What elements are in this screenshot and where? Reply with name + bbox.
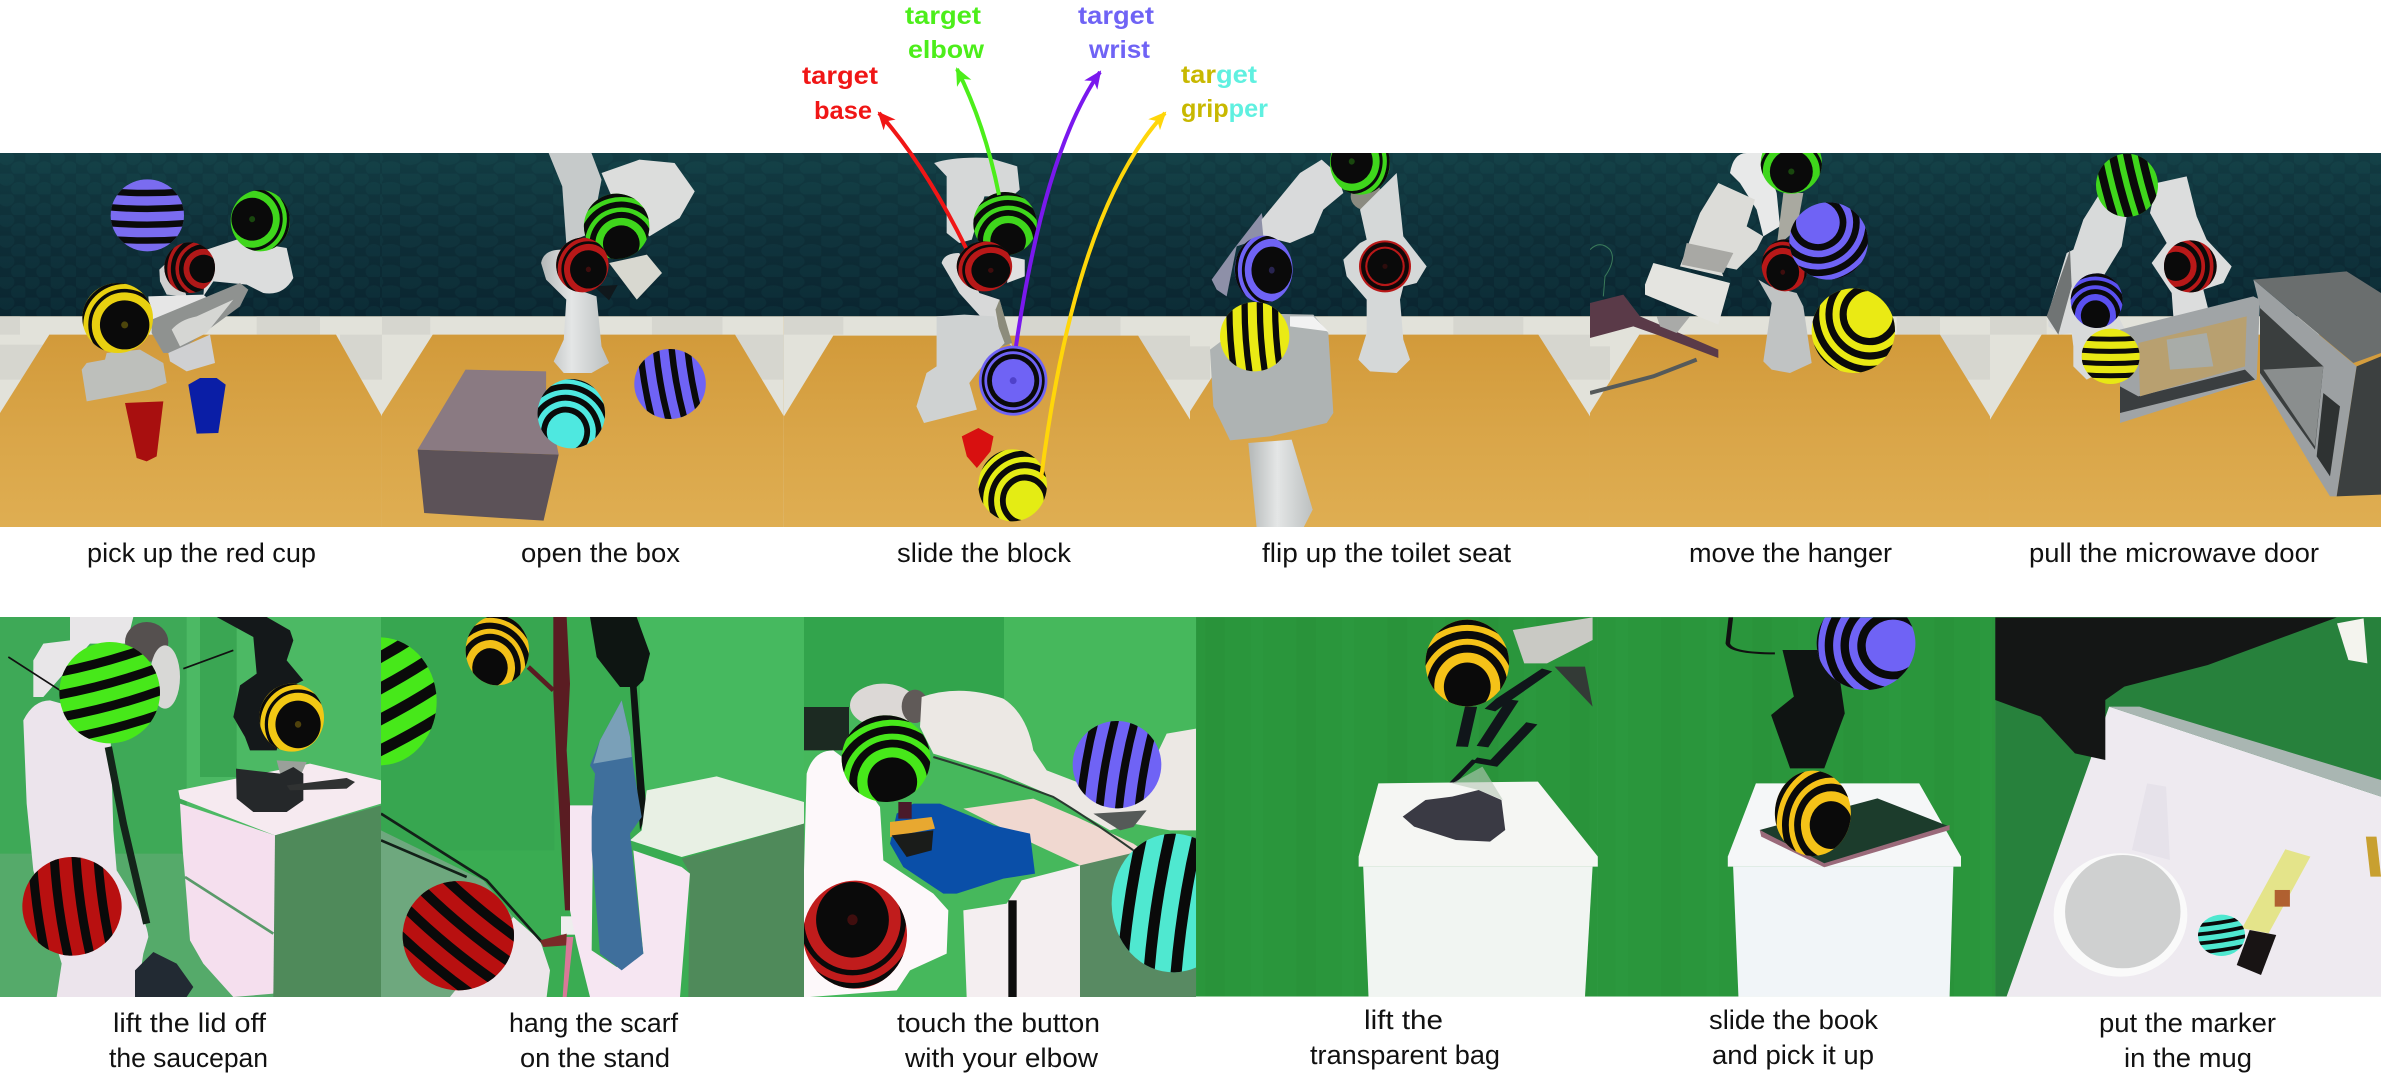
caption: open the box: open the box (521, 538, 681, 568)
cable (933, 757, 1133, 850)
stand (528, 617, 577, 997)
scarf (590, 700, 643, 970)
target wrist ball (1066, 714, 1168, 815)
label: target base: target (802, 62, 879, 90)
target elbow ball (584, 194, 650, 259)
caption: touch the button with your elbow: touch the button (897, 1008, 1100, 1038)
arrow: target gripper (1041, 113, 1165, 479)
label: target wrist: target (1078, 2, 1155, 30)
caption: lift the lid off the saucepan: lift the lid off (113, 1008, 267, 1038)
target elbow ball (1330, 153, 1390, 195)
gripper (590, 617, 650, 830)
target elbow ball (2089, 147, 2165, 224)
target base ball (1359, 240, 1411, 292)
target gripper ball (1220, 302, 1290, 372)
microwave (2253, 271, 2381, 496)
panel: touch the button with your elbow scene (779, 617, 1245, 999)
target gripper ball (538, 379, 606, 448)
label: target elbow (905, 2, 985, 64)
caption: hang the scarf on the stand (509, 1008, 678, 1073)
target base ball (556, 238, 609, 292)
target base ball (380, 859, 537, 1013)
target wrist ball (2053, 270, 2138, 361)
target base ball (956, 241, 1012, 292)
target elbow ball (48, 631, 171, 755)
label: target wrist: wrist (1088, 36, 1151, 64)
caption: pull the microwave door: pull the microwave door (2029, 538, 2319, 568)
panel: pick up the red cup scene (0, 153, 382, 530)
panel: slide the block scene (784, 153, 1190, 527)
pencil (2366, 837, 2381, 877)
robot base (23, 700, 148, 997)
target gripper ball (82, 283, 153, 353)
caption: lift the transparent bag: lift the (1364, 1005, 1443, 1035)
gripper (1771, 650, 1845, 768)
panel: slide the book and pick it up scene (1598, 565, 1995, 997)
panel: hang the scarf on the stand scene (305, 596, 804, 1013)
robot upper arm (33, 617, 133, 697)
arrow: target base (879, 113, 966, 248)
target gripper ball (1404, 620, 1531, 753)
label: target base (802, 62, 879, 125)
bag on floor (135, 952, 193, 997)
gripper (1452, 670, 1547, 783)
panel: open the box scene (382, 153, 784, 530)
gripper overhead (1995, 617, 2337, 760)
target base ball (164, 242, 215, 293)
robot wrist block (1645, 183, 1763, 325)
label: target elbow: target (905, 2, 982, 30)
caption: touch the button with your elbow: with your elbow (904, 1043, 1099, 1073)
panel: lift the transparent bag scene (1196, 617, 1598, 997)
caption: slide the block: slide the block (897, 538, 1071, 568)
arrow: target wrist (1016, 72, 1100, 346)
caption: slide the book and pick it up (1709, 1005, 1878, 1070)
target gripper ball (426, 596, 554, 738)
caption: lift the lid off the saucepan (109, 1008, 268, 1073)
target base ball (16, 851, 128, 962)
toilet seat (1210, 313, 1333, 528)
target base ball (1762, 239, 1808, 292)
target gripper ball (2082, 329, 2140, 384)
gripper (217, 617, 303, 750)
caption: lift the transparent bag: transparent bag (1310, 1040, 1500, 1070)
caption: slide the book and pick it up: slide the book (1709, 1005, 1878, 1035)
cabinet (963, 799, 1196, 997)
marker (2237, 849, 2310, 975)
robot arm (541, 250, 609, 373)
box (418, 370, 559, 521)
target gripper ball (2194, 911, 2249, 959)
target gripper ball (1102, 823, 1245, 983)
caption: touch the button with your elbow (897, 1008, 1100, 1073)
cables (108, 747, 147, 924)
book (1760, 798, 1950, 867)
target wrist ball (979, 346, 1047, 416)
cabinet (1728, 783, 1961, 997)
label: target gripper: gripper (1181, 95, 1268, 123)
transparent bag (1403, 767, 1505, 842)
annotation arrows (879, 69, 1165, 479)
target elbow ball (1760, 153, 1822, 194)
button (890, 802, 935, 857)
caption: lift the lid off the saucepan: the saucepan (109, 1043, 268, 1073)
target gripper ball (1812, 288, 1895, 373)
panel: pull the microwave door scene (1990, 147, 2381, 530)
panel: put the marker in the mug scene (1995, 617, 2381, 997)
target wrist ball (634, 349, 706, 419)
panel: flip up the toilet seat scene (1190, 117, 1590, 530)
robot base (381, 814, 550, 997)
caption: lift the transparent bag (1310, 1005, 1500, 1070)
cabinet (570, 776, 804, 997)
target gripper ball (1751, 736, 1910, 914)
target wrist ball (1789, 202, 1868, 280)
target elbow ball (305, 616, 455, 786)
target base ball (779, 843, 927, 999)
caption: put the marker in the mug: in the mug (2124, 1043, 2252, 1073)
caption: slide the book and pick it up: and pick it up (1712, 1040, 1874, 1070)
caption: pick up the red cup: pick up the red cup (87, 538, 316, 568)
table (2007, 707, 2381, 997)
red cup (125, 401, 163, 461)
robot column (1758, 280, 1812, 373)
label: target gripper (1181, 61, 1268, 123)
microwave door (2120, 296, 2260, 423)
panel: move the hanger scene (1590, 132, 1990, 530)
saucepan (236, 760, 355, 812)
caption: put the marker in the mug (2099, 1008, 2276, 1073)
robot arm (2047, 176, 2232, 380)
target gripper ball (241, 664, 354, 783)
blue cloth (890, 804, 1035, 894)
target gripper ball (978, 449, 1047, 522)
cabinet (1359, 782, 1598, 997)
target elbow ball (973, 192, 1037, 255)
robot base (804, 750, 948, 997)
label: target gripper: target (1181, 61, 1258, 89)
panel: lift the lid off the saucepan scene (0, 617, 381, 997)
target base ball (2136, 227, 2217, 306)
target wrist ball (1234, 236, 1293, 303)
cabinet (178, 764, 381, 997)
robot arm (850, 684, 1196, 830)
target wrist ball (1808, 565, 1979, 726)
caption: hang the scarf on the stand: on the stand (520, 1043, 670, 1073)
label: target base: base (814, 97, 872, 125)
target elbow ball (809, 700, 975, 862)
target elbow ball (230, 190, 290, 252)
caption: put the marker in the mug: put the marker (2099, 1008, 2276, 1038)
caption: flip up the toilet seat: flip up the toilet seat (1262, 538, 1512, 568)
caption: hang the scarf on the stand: hang the scarf (509, 1008, 678, 1038)
robot hand (916, 315, 1005, 423)
label: target wrist (1078, 2, 1155, 64)
label: target elbow: elbow (908, 36, 985, 64)
blue cup (188, 378, 226, 434)
mug (2054, 783, 2187, 977)
caption: move the hanger: move the hanger (1689, 538, 1892, 568)
red block (962, 428, 994, 468)
robot arm (1343, 173, 1427, 373)
arrow: target elbow (957, 69, 999, 195)
hanger (1590, 245, 1718, 393)
target wrist ball (111, 179, 184, 251)
